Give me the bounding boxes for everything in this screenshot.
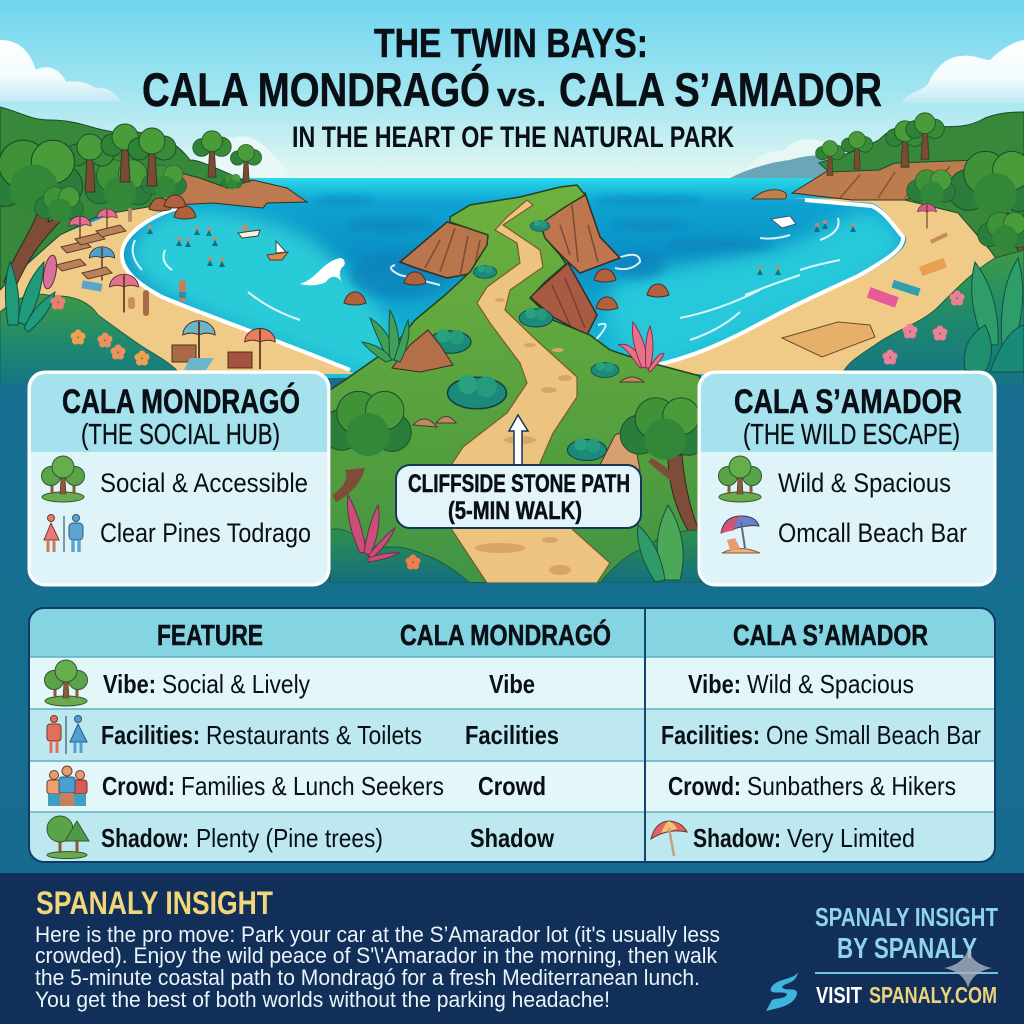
brown boulder: [392, 330, 453, 372]
row: shadow: [47, 816, 915, 858]
surf: right shore: [652, 200, 903, 366]
plant: green agave: [362, 310, 409, 362]
green land: [330, 185, 700, 583]
sky: [0, 0, 1024, 180]
right cliff ridges: [560, 205, 598, 262]
trees: right ridge: [816, 113, 944, 175]
left cliff: [400, 222, 503, 278]
title line 2: [142, 63, 882, 116]
swimmers: right bay: [757, 220, 856, 275]
big tree: left: [0, 140, 83, 286]
footer body text: You get the best of both worlds without the parking headache!: [35, 987, 610, 1012]
row: facilities: Facilities:: [661, 720, 760, 750]
icon: parasol: [651, 821, 687, 856]
row: facilities: Restaurants & Toilets: [206, 720, 422, 750]
boats: left bay: [238, 225, 288, 260]
loungers: left beach: [56, 225, 126, 292]
row: shadow: Shadow: [470, 823, 555, 853]
callout: cliffside stone path: [396, 415, 641, 528]
bushes on headland: [429, 220, 619, 460]
callout text: CLIFFSIDE STONE PATH: [408, 470, 630, 498]
swimmers: left bay: [147, 225, 225, 267]
row: vibe: Vibe:: [688, 669, 741, 699]
plant: left leaves: [5, 262, 55, 332]
sea: [0, 178, 1024, 378]
watermark star: [944, 949, 992, 988]
item: beach bar: Omcall Beach Bar: [778, 518, 967, 548]
item: wild: Wild & Spacious: [778, 468, 951, 498]
row: shadow: Shadow:: [693, 823, 781, 853]
footer body text: the 5-minute coastal path to Mondragó for a fresh Mediterranean lunch.: [35, 965, 700, 990]
boulder right: [600, 428, 640, 470]
panel heading: CALA MONDRAGÓ: [62, 383, 300, 421]
row: shadow: Plenty (Pine trees): [196, 823, 383, 853]
right tree on headland: [620, 398, 706, 538]
panel heading: CALA S’AMADOR: [734, 383, 962, 421]
footer body text: [35, 922, 720, 1012]
panel: Cala Mondragó: [29, 372, 329, 585]
right headland: rock: [792, 158, 979, 200]
row: vibe: [44, 660, 914, 706]
lower background band: [0, 583, 1024, 873]
row: crowd: Crowd:: [668, 771, 741, 801]
footer: [0, 873, 1024, 1024]
trees: left ridge: [66, 124, 262, 208]
sand: left beach: [0, 204, 355, 374]
panel header: [31, 374, 327, 452]
right cliff: [537, 193, 620, 273]
distant hill: [730, 155, 840, 178]
central headland: [321, 185, 706, 583]
title line 2: CALA S’AMADOR: [559, 63, 882, 116]
subtitle: IN THE HEART OF THE NATURAL PARK: [292, 121, 734, 154]
icon: beach umbrella: [721, 516, 760, 553]
row: facilities: One Small Beach Bar: [766, 720, 981, 750]
table headers: FEATURE: [157, 620, 263, 652]
row: vibe: Vibe: [489, 669, 535, 699]
flower: [406, 554, 420, 570]
sunbathers and towels: right beach: [867, 204, 948, 308]
cloud: behind right trees: [740, 139, 840, 178]
umbrellas: left beach: [69, 209, 275, 369]
branding: [766, 902, 998, 1011]
title line 2: vs.: [497, 77, 546, 113]
side band right: [995, 385, 1024, 585]
path stones: [475, 298, 572, 575]
footer body text: Here is the pro move: Park your car at the S’Amarador lot (it's usually less: [35, 922, 720, 947]
row: crowd: Crowd:: [102, 771, 175, 801]
wave: [300, 258, 345, 285]
row: shadow: Very Limited: [787, 823, 915, 853]
table headers: CALA MONDRAGÓ: [400, 618, 611, 652]
row: facilities: Facilities: [465, 720, 559, 750]
sand: right beach: [650, 198, 1024, 374]
illustration: twin bays scene: [0, 0, 1024, 583]
left cliff ridges: [425, 228, 480, 276]
rocks in water: [149, 190, 786, 310]
panel: Cala S'Amador: [699, 372, 995, 585]
deep water streaks: [315, 196, 775, 299]
arrow: [509, 415, 528, 465]
callout: cliffside stone path: (5-MIN WALK): [448, 497, 582, 525]
row: crowd: Families & Lunch Seekers: [181, 771, 444, 801]
shallow water: right bay: [606, 210, 904, 370]
row: vibe: Wild & Spacious: [747, 669, 914, 699]
left headland: foliage: [0, 107, 252, 290]
icon: trees: [42, 456, 84, 502]
picnic tables: [172, 345, 252, 370]
lower cliff ridges: [552, 278, 585, 328]
bushes behind right beach: [907, 170, 955, 205]
large leaves: [638, 505, 683, 582]
stone path: [450, 200, 610, 583]
lower right cliff: [530, 263, 597, 335]
bottom bushes: left: [330, 529, 470, 583]
flowers: [50, 290, 964, 366]
left headland: rock: [160, 170, 307, 208]
title: [142, 20, 882, 154]
small rocks: [413, 377, 644, 427]
people: left beach: [128, 208, 186, 316]
foliage: lower right: [842, 250, 1024, 400]
panel header: [701, 374, 993, 452]
row: crowd: Crowd: [478, 771, 546, 801]
left tree on headland: [321, 391, 411, 502]
comparison table: [29, 608, 995, 862]
row: vibe: Social & Lively: [162, 669, 310, 699]
footer body text: crowded). Enjoy the wild peace of S'\'Amarador in the morning, then walk: [35, 943, 718, 968]
visit text: VISIT: [816, 982, 862, 1008]
row: vibe: Vibe:: [103, 669, 156, 699]
branding: BY SPANALY: [837, 933, 977, 965]
logo: [766, 972, 798, 1011]
title line 1: THE TWIN BAYS:: [374, 20, 648, 66]
right headland: foliage: [819, 112, 1024, 300]
surfboard: [41, 254, 59, 290]
yacht: right bay: [771, 216, 796, 228]
right headland: cliff lines: [840, 166, 950, 198]
item: pines: Clear Pines Todrago: [100, 518, 311, 548]
cloud: top right: [902, 40, 1024, 103]
cloud: top left: [0, 40, 122, 102]
row: crowd: Sunbathers & Hikers: [747, 771, 956, 801]
foam lines: [133, 218, 840, 352]
row: crowd: [47, 766, 956, 806]
row: shadow: Shadow:: [101, 823, 189, 853]
table headers: [157, 618, 928, 652]
item: social: Social & Accessible: [100, 468, 308, 498]
sand mound: [782, 322, 875, 357]
title line 2: CALA MONDRAGÓ: [142, 63, 490, 116]
plant: pink left: [348, 495, 400, 562]
footer heading: SPANALY INSIGHT: [36, 885, 273, 921]
plant: pink right: [618, 322, 664, 372]
big tree: right: [948, 151, 1024, 260]
row: facilities: [47, 716, 981, 754]
side band left: [0, 385, 29, 585]
surf: left shore: [122, 208, 350, 370]
plant: right leaves: [964, 258, 1024, 372]
row: facilities: Facilities:: [101, 720, 200, 750]
icon: toilets: [44, 514, 83, 552]
table headers: CALA S’AMADOR: [733, 620, 928, 652]
panel subheading: (THE SOCIAL HUB): [81, 419, 280, 451]
cloud: behind left trees: [195, 136, 290, 178]
panel subheading: (THE WILD ESCAPE): [743, 419, 960, 451]
bottom bushes: right: [600, 530, 700, 583]
shallow water: left bay: [131, 210, 394, 372]
icon: trees: [718, 456, 762, 502]
foliage: lower left: [0, 294, 180, 400]
